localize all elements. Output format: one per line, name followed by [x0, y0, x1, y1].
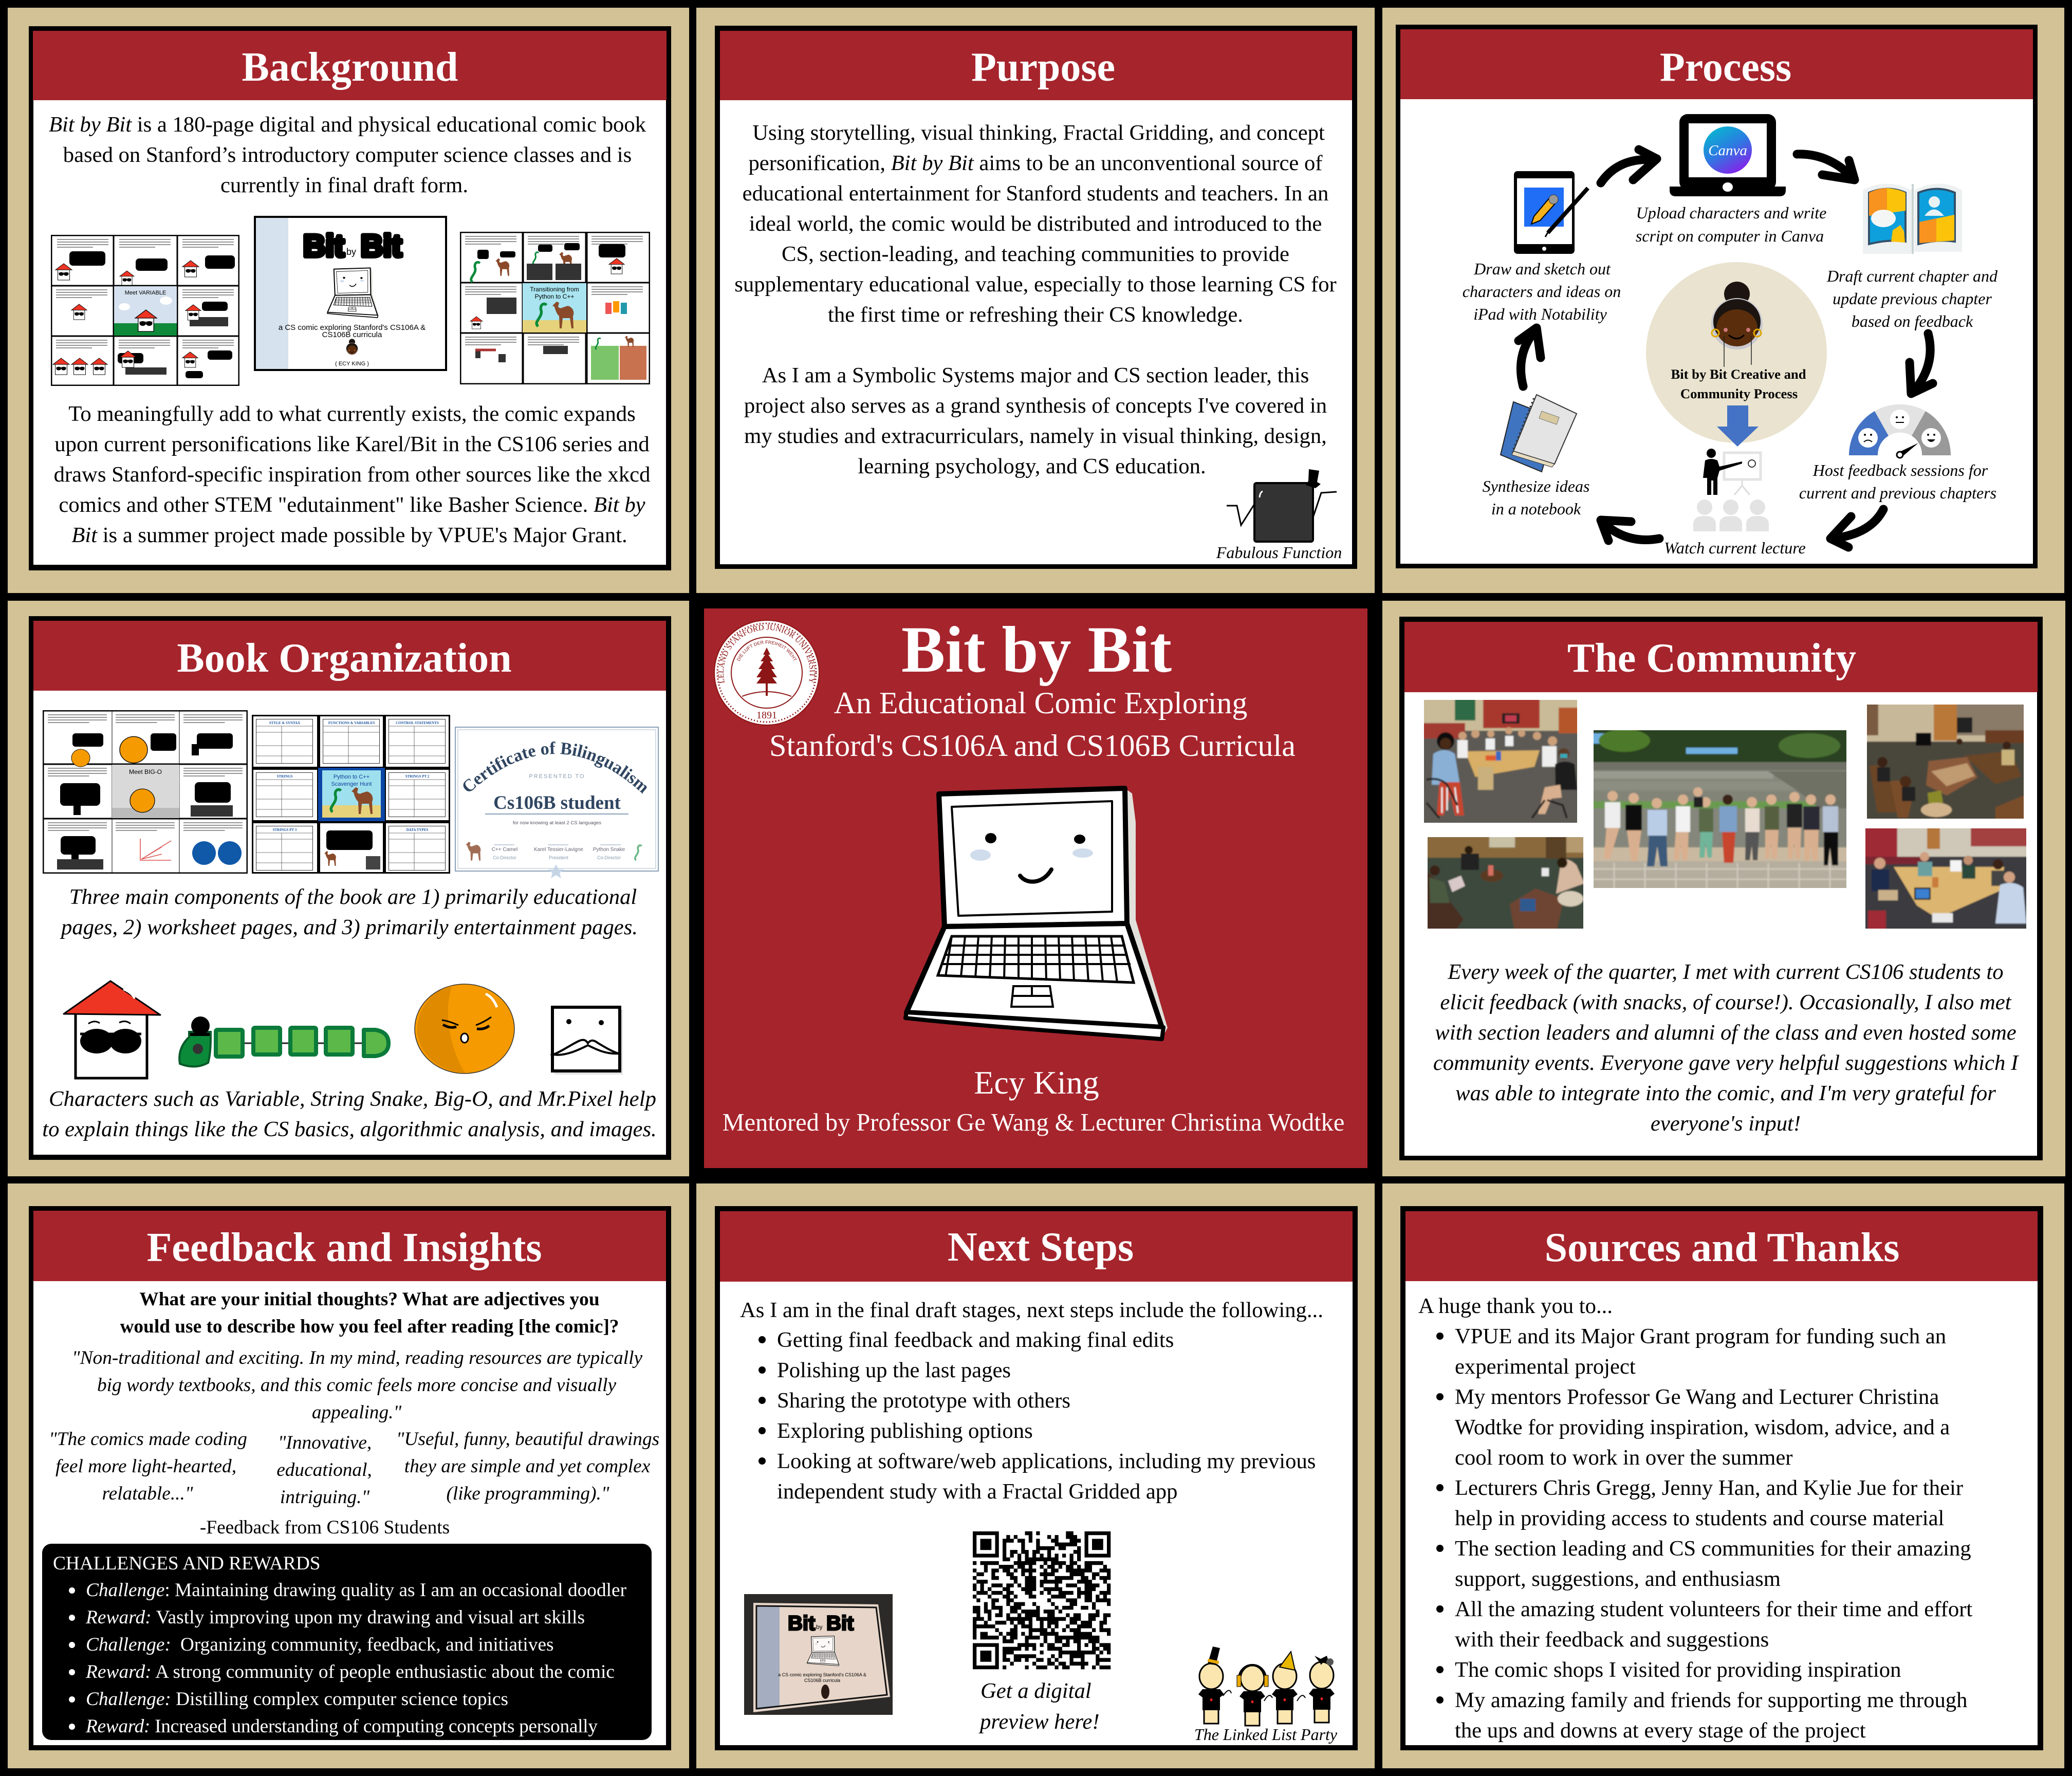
comic cover: Bit by Bit: a CS comic exploring Stanford's CS106A & — [279, 323, 425, 332]
photo: printed comic: Bit — [826, 1612, 854, 1635]
subtitle: An Educational Comic Exploring — [834, 686, 1247, 720]
text block: thanks list: A huge thank you to... — [1418, 1294, 1613, 1318]
text block: synthesize step — [1483, 477, 1589, 518]
heading: Sources and Thanks — [1405, 1211, 2038, 1281]
panel: Sources and Thanks — [1382, 1183, 2064, 1768]
text block: next steps list: Sharing the prototype with others — [777, 1389, 1070, 1413]
icon: Stanford seal: LELAND STANFORD JUNIOR UNIVERSITY — [718, 624, 815, 683]
text block: background intro — [49, 113, 646, 197]
heading: Process — [1400, 29, 2033, 99]
subtitle — [769, 686, 1296, 763]
photo: small-room session — [1428, 837, 1583, 929]
text block: characters — [42, 1087, 657, 1141]
comic page: Meet Variable: Meet VARIABLE — [125, 290, 166, 296]
worksheet pages: Python to C++ — [334, 774, 369, 780]
photo: printed comic: by — [816, 1623, 823, 1631]
text block: background intro: currently in final draft form. — [220, 173, 468, 197]
icon: lecture presenter — [1693, 449, 1769, 531]
quote: non-traditional: big wordy textbooks, and this comic feels more concise and visually — [97, 1375, 616, 1396]
heading: Background — [33, 31, 667, 100]
text block: next steps list: Polishing up the last pages — [777, 1358, 1011, 1382]
center circle — [1646, 262, 1827, 443]
text block: thanks list: The comic shops I visited for providing inspiration — [1455, 1658, 1901, 1682]
comic page: Big-O: Meet BIG-O — [129, 768, 162, 775]
icon: laptop with Canva — [1670, 114, 1786, 196]
text block: background expansion: upon current personifications like Karel/Bit in the CS106 series and — [54, 432, 650, 456]
QR code — [973, 1533, 1111, 1668]
text block: upload step: script on computer in Canva — [1636, 227, 1824, 245]
text block: purpose paragraph two: learning psychology, and CS education. — [858, 454, 1206, 478]
text block: book components: pages, 2) worksheet pages, and 3) primarily entertainment pages. — [60, 915, 638, 939]
text block: draft step: Draft current chapter and — [1826, 267, 1998, 285]
text block: thanks list: experimental project — [1455, 1355, 1636, 1379]
text block: thanks list: Wodtke for providing inspiration, wisdom, advice, and a — [1455, 1415, 1950, 1439]
worksheet pages: STRINGS PT 3 — [273, 828, 297, 832]
text block: book components — [60, 885, 638, 939]
text block: next steps list: Exploring publishing options — [777, 1419, 1033, 1443]
callout: challenges and rewards — [42, 1544, 652, 1740]
worksheet pages: STRINGS PT 2 — [405, 774, 430, 779]
quote: light-hearted: relatable..." — [102, 1483, 193, 1504]
text block: purpose paragraph one: CS, section-leading, and teaching communities to provide — [782, 242, 1289, 266]
certificate of bilingualism: for now knowing at least 2 CS languages — [513, 820, 601, 826]
comic page: Python to C++ — [460, 232, 650, 384]
arrow: center to lecture — [1717, 405, 1759, 447]
text block: host step: Host feedback sessions for — [1812, 461, 1988, 479]
quote: non-traditional — [72, 1347, 642, 1423]
text block: background expansion: comics and other STEM "edutainment" like Basher Science. Bit by — [59, 493, 645, 517]
photo: printed comic — [744, 1594, 893, 1715]
text block: background expansion: To meaningfully add to what currently exists, the comic expands — [68, 402, 636, 426]
text block: draw step — [1463, 260, 1621, 323]
text block: draft step: update previous chapter — [1833, 289, 1992, 308]
quote: light-hearted: "The comics made coding — [49, 1429, 247, 1450]
icon: tablet with Notability — [1514, 171, 1588, 254]
heading: Book Organization: Book Organization — [177, 636, 512, 681]
panel: title — [704, 608, 1367, 1168]
text block: thanks list: the ups and downs at every stage of the project — [1455, 1718, 1866, 1743]
attribution: -Feedback from CS106 Students — [200, 1517, 450, 1538]
comic cover: Bit by Bit — [255, 217, 446, 370]
callout: challenges and rewards: Reward: Increased understanding of computing concepts personally — [85, 1716, 598, 1737]
heading: Background: Background — [242, 45, 458, 90]
text block: draft step: based on feedback — [1852, 312, 1973, 330]
certificate of bilingualism: C++ Camel — [492, 847, 517, 853]
text block: background expansion: Bit is a summer project made possible by VPUE's Major Grant. — [71, 523, 627, 547]
certificate of bilingualism: Co-Director — [493, 855, 516, 860]
worksheet pages: STRINGS — [277, 774, 292, 779]
text block: lecture step: Watch current lecture — [1664, 539, 1806, 557]
text block: thanks list — [1418, 1294, 1972, 1743]
panel: Purpose — [696, 8, 1375, 593]
text block: community: Every week of the quarter, I met with current CS106 students to — [1447, 960, 2004, 984]
arrows: process cycle — [1519, 150, 1933, 547]
quote: useful: "Useful, funny, beautiful drawings — [396, 1429, 659, 1450]
icon: Stanford seal — [714, 620, 820, 726]
center caption — [1671, 366, 1806, 401]
comic page: Python to C++: Transitioning from — [530, 286, 579, 293]
text block: purpose paragraph one — [734, 121, 1337, 327]
photo: printed comic: a CS comic exploring Stanford's CS106A & — [778, 1672, 866, 1677]
center caption: Community Process — [1680, 386, 1798, 401]
QR caption — [978, 1679, 1100, 1734]
comic page: Meet Variable — [51, 235, 239, 386]
heading: Next Steps: Next Steps — [948, 1225, 1134, 1270]
photo: printed comic: CS106B curricula — [804, 1678, 840, 1683]
icon: Linked List Party — [1194, 1646, 1338, 1744]
text block: thanks list: All the amazing student volunteers for their time and effort — [1455, 1597, 1972, 1621]
icon: feedback gauge — [1849, 404, 1951, 458]
text block: community: was able to integrate into the comic, and I'm very grateful for — [1455, 1081, 1996, 1105]
quote: non-traditional: appealing." — [312, 1402, 401, 1423]
worksheet pages: FUNCTIONS & VARIABLES — [328, 721, 375, 725]
text block: next steps list: Looking at software/web applications, including my previous — [777, 1449, 1316, 1473]
survey question: would use to describe how you feel after reading [the comic]? — [120, 1316, 619, 1337]
text block: upload step: Upload characters and write — [1636, 203, 1826, 222]
QR caption: Get a digital — [980, 1679, 1092, 1703]
photo: group at table — [1424, 700, 1577, 823]
certificate of bilingualism: Karel Tessier-Lavigne — [534, 847, 583, 853]
comic cover: Bit by Bit: Bit — [361, 229, 402, 263]
text block: purpose paragraph two — [744, 363, 1327, 478]
certificate of bilingualism: President — [549, 855, 569, 860]
survey question — [120, 1289, 619, 1337]
quote: innovative — [276, 1432, 372, 1508]
photo: printed comic: Bit — [788, 1612, 815, 1635]
comic cover: Bit by Bit: CS106B curricula — [322, 330, 382, 339]
comic page: Big-O — [43, 710, 248, 874]
quote: useful: (like programming)." — [446, 1483, 609, 1504]
icon: open comic book — [1863, 184, 1962, 254]
icon: Fabulous Function character: Fabulous Function — [1216, 543, 1342, 562]
heading: Sources and Thanks: Sources and Thanks — [1545, 1225, 1899, 1270]
text block: community: with section leaders and alumni of the class and even hosted some — [1435, 1021, 2016, 1045]
icon: notebooks — [1501, 395, 1577, 472]
character: Big-O — [415, 984, 514, 1074]
certificate of bilingualism: Co-Director — [597, 855, 621, 860]
text block: purpose paragraph one: educational entertainment for Stanford students and teachers. In an — [743, 181, 1328, 206]
worksheet pages: Scavenger Hunt — [331, 781, 372, 787]
text block: next steps list — [740, 1298, 1323, 1504]
text block: host step — [1799, 461, 1996, 502]
text block: synthesize step: Synthesize ideas — [1483, 477, 1589, 495]
callout: challenges and rewards: CHALLENGES AND REWARDS — [53, 1553, 321, 1574]
certificate of bilingualism — [455, 727, 659, 878]
quote: useful — [396, 1429, 659, 1504]
heading: Feedback and Insights — [33, 1211, 666, 1281]
text block: purpose paragraph one: the first time or refreshing their CS knowledge. — [828, 303, 1243, 327]
author: Ecy King — [974, 1064, 1099, 1101]
center caption: Bit by Bit Creative and — [1671, 366, 1806, 382]
photo: lounge session — [1867, 705, 2024, 819]
survey question: What are your initial thoughts? What are adjectives you — [139, 1289, 600, 1310]
panel: Feedback and Insights — [8, 1183, 689, 1768]
quote: innovative: intriguing." — [280, 1487, 369, 1508]
heading: The Community: The Community — [1567, 636, 1856, 681]
comic cover: Bit by Bit: Bit — [303, 229, 344, 263]
text block: thanks list: help in providing access to students and course material — [1455, 1506, 1944, 1530]
comic cover: Bit by Bit: by — [346, 247, 356, 257]
heading: Book Organization — [33, 621, 666, 691]
panel: The Community — [1382, 601, 2065, 1176]
text block: thanks list: The section leading and CS communities for their amazing — [1455, 1537, 1971, 1561]
photo: table workshop — [1865, 828, 2026, 929]
callout: challenges and rewards: Reward: A strong community of people enthusiastic about the comic — [85, 1661, 615, 1682]
panel: Process — [1382, 8, 2064, 593]
character: Mr. Pixel — [552, 1007, 623, 1075]
text block: draw step: iPad with Notability — [1473, 305, 1607, 323]
panel: Background — [8, 8, 689, 593]
text block: draft step — [1826, 267, 1998, 330]
worksheet pages: DATA TYPES — [406, 828, 428, 832]
text block: community: everyone's input! — [1651, 1112, 1801, 1136]
text block: thanks list: support, suggestions, and enthusiasm — [1455, 1567, 1781, 1591]
quote: light-hearted: feel more light-hearted, — [55, 1456, 236, 1477]
text block: characters: Characters such as Variable, String Snake, Big-O, and Mr.Pixel help — [49, 1087, 656, 1111]
photo: outdoor group — [1594, 730, 1846, 888]
heading: The Community — [1404, 622, 2038, 692]
text block: draw step: characters and ideas on — [1463, 282, 1621, 301]
panel: Next Steps — [696, 1183, 1375, 1768]
heading: Purpose — [720, 31, 1352, 100]
title: Bit by Bit — [901, 613, 1172, 686]
callout: challenges and rewards: Reward: Vastly improving upon my drawing and visual art skills — [85, 1607, 585, 1628]
text block: characters: to explain things like the CS basics, algorithmic analysis, and images. — [42, 1117, 657, 1141]
text block: host step: current and previous chapters — [1799, 484, 1996, 502]
icon: Fabulous Function character — [1216, 469, 1342, 562]
certificate of bilingualism: Certificate of Bilingualism — [464, 742, 646, 794]
text block: purpose paragraph one: ideal world, the comic would be distributed and introduced to the — [749, 212, 1322, 236]
icon: author portrait — [1711, 282, 1763, 367]
icon: Stanford seal: DIE LUFT DER FREIHEIT WEHT — [737, 640, 797, 661]
subtitle: Stanford's CS106A and CS106B Curricula — [769, 729, 1296, 763]
comic cover: Bit by Bit: ( ECY KING ) — [335, 361, 369, 367]
quote: light-hearted — [49, 1429, 247, 1504]
text block: next steps list: As I am in the final draft stages, next steps include the following... — [740, 1298, 1323, 1322]
text block: next steps list: Getting final feedback and making final edits — [777, 1328, 1174, 1352]
text block: community — [1433, 960, 2019, 1136]
callout: challenges and rewards: Challenge: Organizing community, feedback, and initiatives — [86, 1634, 554, 1655]
heading: Purpose: Purpose — [971, 45, 1115, 90]
worksheet pages: STYLE & SYNTAX — [269, 721, 300, 725]
text block: book components: Three main components of the book are 1) primarily educational — [69, 885, 637, 909]
panel: Book Organization — [8, 601, 689, 1176]
quote: innovative: educational, — [276, 1459, 372, 1481]
worksheet pages — [252, 715, 450, 874]
character: String Snake — [179, 1016, 388, 1067]
certificate of bilingualism: Cs106B student — [493, 792, 621, 813]
text block: purpose paragraph one: personification, Bit by Bit aims to be an unconventional source of — [748, 151, 1323, 175]
quote: innovative: "Innovative, — [278, 1432, 372, 1453]
text block: purpose paragraph two: project also serves as a grand synthesis of concepts I've covered in — [744, 394, 1327, 418]
text block: next steps list: independent study with a Fractal Gridded app — [777, 1479, 1177, 1504]
QR caption: preview here! — [978, 1710, 1100, 1734]
icon: smiling laptop — [905, 788, 1168, 1041]
quote: useful: they are simple and yet complex — [404, 1456, 651, 1477]
text block: purpose paragraph one: Using storytelling, visual thinking, Fractal Gridding, and concept — [752, 121, 1325, 145]
text block: draw step: Draw and sketch out — [1473, 260, 1611, 278]
certificate of bilingualism: Python Snake — [593, 847, 625, 853]
text block: purpose paragraph two: my studies and extracurriculars, namely in visual thinking, design, — [744, 424, 1327, 448]
text block: synthesize step: in a notebook — [1491, 499, 1581, 518]
heading: Feedback and Insights: Feedback and Insights — [146, 1225, 542, 1270]
text block: background intro: Bit by Bit is a 180-page digital and physical educational comic book — [49, 113, 646, 137]
text block: community: community events. Everyone gave very helpful suggestions which I — [1433, 1051, 2019, 1075]
text block: purpose paragraph one: supplementary educational value, especially to those learning CS for — [734, 272, 1337, 297]
character: Variable — [64, 981, 160, 1078]
text block: background intro: based on Stanford’s introductory computer science classes and is — [63, 143, 632, 167]
text block: thanks list: My mentors Professor Ge Wang and Lecturer Christina — [1455, 1385, 1939, 1409]
text block: background expansion — [54, 402, 650, 547]
text block: background expansion: draws Stanford-specific inspiration from other sources like the xkcd — [54, 462, 650, 487]
text block: thanks list: My amazing family and friends for supporting me through — [1455, 1688, 1967, 1712]
icon: Stanford seal: 1891 — [756, 710, 777, 721]
callout: challenges and rewards: Challenge: Maintaining drawing quality as I am an occasional doodler — [86, 1580, 627, 1601]
text block: thanks list: with their feedback and suggestions — [1455, 1627, 1769, 1652]
icon: Linked List Party: The Linked List Party — [1194, 1725, 1338, 1744]
text block: community: elicit feedback (with snacks, of course!). Occasionally, I also met — [1440, 990, 2012, 1014]
icon: laptop with Canva: Canva — [1708, 142, 1747, 159]
heading: Next Steps — [720, 1211, 1353, 1282]
worksheet pages: CONTROL STATEMENTS — [396, 721, 439, 725]
quote: non-traditional: "Non-traditional and exciting. In my mind, reading resources are typically — [72, 1347, 642, 1368]
certificate of bilingualism: PRESENTED TO — [529, 773, 585, 780]
text block: thanks list: Lecturers Chris Gregg, Jenny Han, and Kylie Jue for their — [1455, 1476, 1963, 1500]
text block: upload step — [1636, 203, 1826, 245]
text block: thanks list: cool room to work in over the summer — [1455, 1446, 1792, 1470]
comic page: Python to C++: Python to C++ — [535, 293, 574, 300]
text block: purpose paragraph two: As I am a Symbolic Systems major and CS section leader, this — [762, 363, 1309, 387]
callout: challenges and rewards: Challenge: Distilling complex computer science topics — [86, 1689, 508, 1710]
text block: thanks list: VPUE and its Major Grant program for funding such an — [1455, 1324, 1946, 1348]
heading: Process: Process — [1660, 45, 1791, 90]
mentors: Mentored by Professor Ge Wang & Lecturer Christina Wodtke — [723, 1109, 1344, 1136]
